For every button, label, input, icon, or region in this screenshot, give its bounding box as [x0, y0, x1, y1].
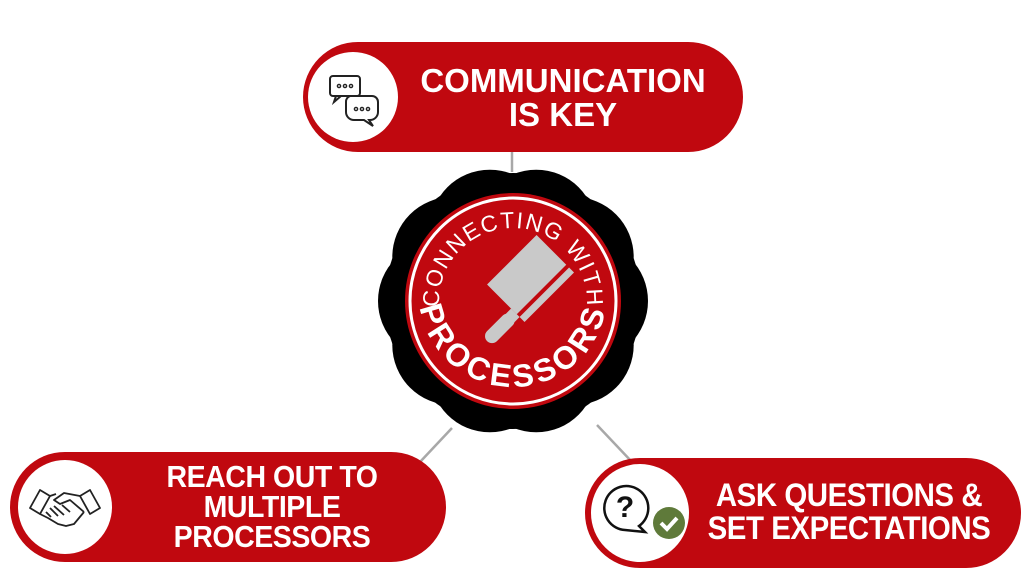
text: ASK QUESTIONS &	[716, 477, 982, 513]
badge text: PROCESSORS	[420, 303, 604, 388]
pill: communication is key	[303, 42, 743, 152]
text: PROCESSORS	[174, 519, 370, 554]
pill: reach out	[10, 452, 446, 562]
icon: question and check	[591, 464, 689, 562]
icon: cleaver	[459, 235, 574, 350]
heading text	[420, 62, 706, 133]
icon: chat bubbles	[308, 52, 398, 142]
text: REACH OUT TO	[166, 459, 378, 494]
heading text: IS KEY	[509, 96, 617, 133]
text: SET EXPECTATIONS	[708, 510, 990, 546]
heading text: COMMUNICATION	[420, 62, 706, 99]
badge text	[420, 212, 604, 388]
text	[708, 477, 990, 546]
pill: ask questions	[585, 458, 1021, 568]
icon: handshake	[18, 460, 112, 554]
badge: connecting with processors	[378, 170, 648, 432]
icon: question and check: ?	[616, 491, 634, 524]
text	[166, 459, 378, 554]
text: MULTIPLE	[204, 489, 340, 524]
badge text: CONNECTING WITH	[423, 212, 603, 306]
